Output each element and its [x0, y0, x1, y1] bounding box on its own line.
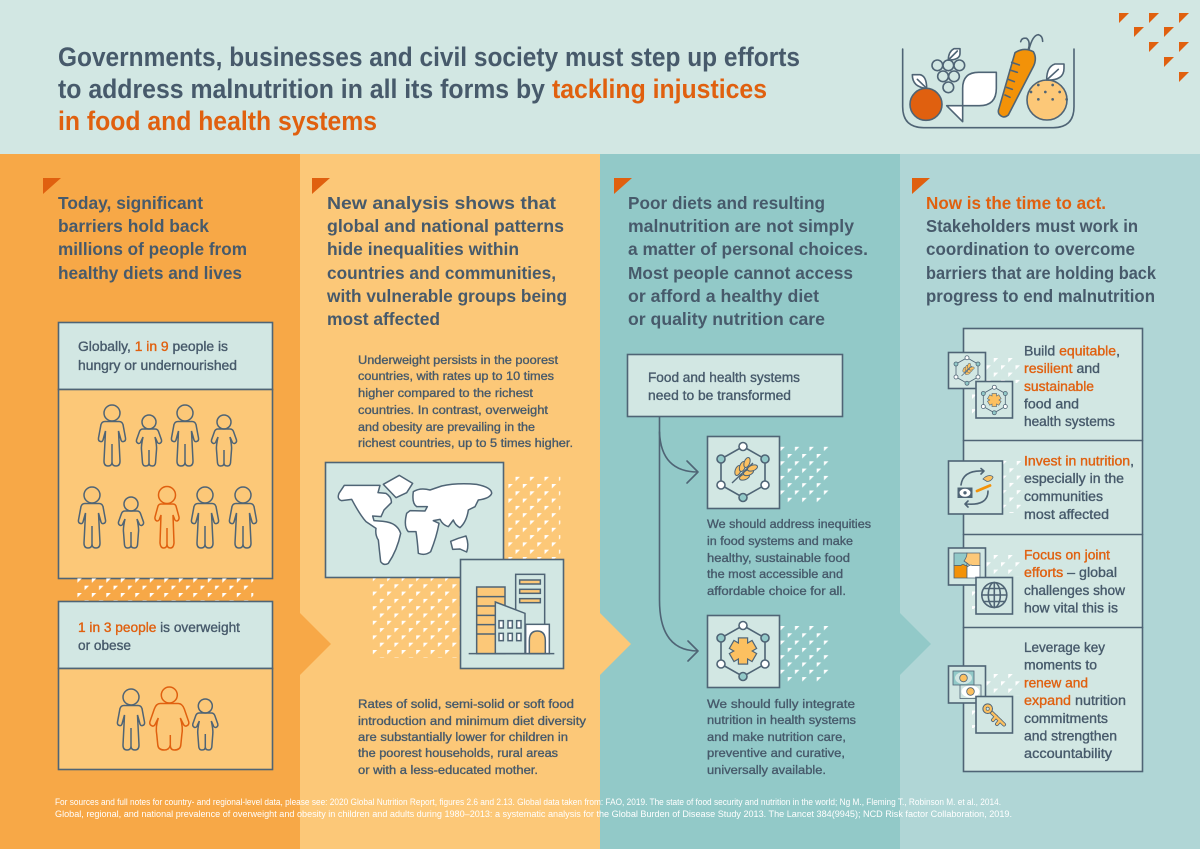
text: underweight and overweight	[358, 353, 573, 450]
callout: 1 in 9 hungry: Globally, 1 in 9 people is	[78, 339, 228, 354]
pictogram: three people, one highlighted	[58, 668, 272, 770]
callout: 1 in 9 hungry	[58, 322, 272, 390]
text: food systems: the most accessible and	[707, 567, 843, 581]
text: action 1: resilient and	[1024, 361, 1100, 376]
callout: 1 in 9 hungry: hungry or undernourished	[78, 358, 237, 373]
heading: inequalities: with vulnerable groups being	[326, 286, 567, 306]
text: action 1: health systems	[1024, 414, 1115, 429]
text: food systems: in food systems and make	[707, 534, 853, 548]
heading: time to act: barriers that are holding back	[926, 263, 1156, 283]
text: action 4: renew and	[1024, 676, 1088, 690]
text: health systems: preventive and curative,	[707, 746, 845, 760]
arrow: column 2 to column 3	[600, 613, 631, 675]
heading: poor diets	[628, 193, 868, 329]
title	[58, 42, 800, 136]
icon: puzzle and globe	[948, 548, 1012, 614]
heading: inequalities: countries and communities,	[327, 263, 556, 283]
heading: barriers: healthy diets and lives	[58, 263, 242, 283]
text: action 3: how vital this is	[1024, 600, 1118, 616]
heading: inequalities: hide inequalities within	[327, 239, 519, 259]
footnote: sources: Global, regional, and national prevalence of overweight and obesity in children and adults during 1980–2013: a systematic analysis for the Global Burden of Disease Study 2013. The Lancet 384(9945); NCD Risk factor Collaboration, 2019.	[55, 809, 1012, 820]
callout: 1 in 3 overweight	[58, 602, 272, 668]
icon: city buildings	[460, 560, 564, 668]
text: underweight and overweight: countries. In contrast, overweight	[358, 403, 549, 417]
callout: 1 in 3 overweight: or obese	[78, 638, 131, 653]
heading: time to act: coordination to overcome	[926, 239, 1135, 259]
header band	[0, 0, 1200, 154]
heading: poor diets: or quality nutrition care	[628, 309, 825, 329]
text: action 3: Focus on joint	[1024, 548, 1110, 562]
title: tackling injustices	[552, 74, 767, 104]
icon: medical asterisk in network	[708, 616, 780, 688]
arrow: branching lines	[660, 416, 698, 661]
text: action 2: communities	[1024, 489, 1103, 504]
text: underweight and overweight: richest countries, up to 5 times higher.	[358, 436, 573, 450]
heading: barriers	[58, 193, 247, 283]
pictogram: nine people, one highlighted	[58, 390, 272, 578]
heading: barriers: millions of people from	[58, 239, 247, 259]
heading: time to act	[926, 193, 1156, 306]
text: action 1: sustainable	[1024, 379, 1094, 394]
text: action 4: moments to	[1024, 658, 1097, 672]
text: action 2: especially in the	[1024, 471, 1124, 486]
heading: time to act: Stakeholders must work in	[926, 216, 1138, 236]
heading: poor diets: or afford a healthy diet	[628, 286, 819, 306]
text: action 4	[1024, 640, 1126, 761]
heading: barriers: Today, significant	[58, 193, 203, 213]
heading: poor diets: malnutrition are not simply	[628, 216, 854, 236]
heading: barriers: barriers hold back	[58, 216, 209, 236]
list panel background	[964, 328, 1142, 772]
icon: section flag	[614, 178, 632, 194]
heading: poor diets: Poor diets and resulting	[628, 193, 825, 213]
panel: poor diets	[614, 178, 871, 777]
triangle pattern: action 1	[972, 358, 1022, 416]
icon: section flag	[43, 178, 61, 194]
text: underweight and overweight: higher compared to the richest	[358, 386, 534, 400]
panel: new analysis	[312, 178, 587, 777]
panel: time to act	[912, 178, 1156, 772]
triangle pattern: action 3	[972, 555, 1022, 609]
callout: systems need to be transformed: need to be transformed	[648, 388, 791, 403]
text: action 3	[1024, 548, 1125, 616]
heading: time to act: progress to end malnutrition	[926, 286, 1155, 306]
triangle pattern: below map	[373, 577, 463, 658]
decorative corner triangles	[1119, 13, 1189, 82]
text: action 1	[1024, 344, 1120, 429]
heading: inequalities	[326, 193, 567, 329]
footnote: sources	[55, 797, 1012, 820]
callout: systems need to be transformed: Food and health systems	[648, 370, 800, 385]
footnote: sources: For sources and full notes for country- and regional-level data, please see: 2020 Global Nutrition Report, figures 2.6 and 2.13. Global data taken from: FAO, 2019. The state of food security and nutrition in the world; Ng M., Fleming T., Robinson M. et al., 2014.	[55, 797, 1001, 808]
icon: money and key	[948, 666, 1012, 733]
text: food systems: We should address inequities	[707, 517, 871, 531]
text: action 4: and strengthen	[1024, 728, 1117, 744]
text: health systems: and make nutrition care,	[707, 730, 846, 744]
text: action 1: Build equitable,	[1024, 344, 1120, 358]
text: food systems	[707, 517, 871, 598]
callout: systems need to be transformed	[628, 354, 842, 416]
text: complementary feeding: the poorest households, rural areas	[358, 746, 558, 760]
title: Governments, businesses and civil society must step up efforts	[58, 42, 800, 72]
title: in food and health systems	[58, 106, 377, 136]
text: complementary feeding: Rates of solid, semi-solid or soft food	[358, 697, 574, 711]
icon: section flag	[912, 178, 930, 194]
text: action 3: challenges show	[1024, 583, 1125, 598]
panel: today's barriers	[43, 178, 272, 770]
text: action 2: most affected	[1024, 507, 1109, 522]
text: action 4: accountability	[1024, 746, 1112, 761]
icon: money cycle into food	[948, 461, 1002, 514]
triangle pattern: right of map	[508, 477, 560, 561]
heading: poor diets: a matter of personal choices.	[628, 239, 868, 259]
text: action 4: expand nutrition	[1024, 693, 1126, 708]
text: complementary feeding: are substantially lower for children in	[358, 730, 568, 744]
triangle pattern strip	[77, 578, 253, 601]
text: complementary feeding: or with a less-educated mother.	[358, 763, 538, 777]
text: health systems: We should fully integrate	[707, 697, 855, 711]
icon: bowl of fruit and vegetables	[903, 35, 1074, 128]
arrow: column 1 to column 2	[300, 613, 331, 675]
text: action 2: Invest in nutrition ,	[1024, 454, 1134, 468]
text: food systems: healthy, sustainable food	[707, 551, 850, 565]
triangle pattern: health systems	[773, 626, 829, 682]
text: food systems: affordable choice for all.	[707, 584, 846, 598]
text: health systems: nutrition in health systems	[707, 713, 856, 727]
triangle pattern: food systems	[773, 447, 829, 503]
text: complementary feeding: introduction and minimum diet diversity	[358, 714, 587, 728]
arrow: column 3 to column 4	[900, 613, 931, 675]
title: to address malnutrition in all its forms by	[58, 74, 545, 104]
callout: 1 in 3 overweight: 1 in 3 people is overweight	[78, 620, 240, 635]
text: underweight and overweight: and obesity are prevailing in the	[358, 420, 535, 434]
text: health systems	[707, 697, 856, 777]
heading: poor diets: Most people cannot access	[628, 263, 853, 283]
text: action 3: efforts – global	[1024, 565, 1117, 580]
text: action 2	[1024, 454, 1134, 522]
text: underweight and overweight: countries, with rates up to 10 times	[358, 369, 554, 383]
triangle pattern: action 4	[972, 674, 1022, 728]
text: underweight and overweight: Underweight persists in the poorest	[358, 353, 559, 367]
icon: world map	[326, 462, 504, 578]
heading: inequalities: most affected	[327, 309, 440, 329]
icon: wheat in network	[708, 436, 780, 508]
heading: inequalities: New analysis shows that	[327, 193, 556, 213]
text: action 4: commitments	[1024, 711, 1108, 726]
text: action 4: Leverage key	[1024, 640, 1105, 655]
text: health systems: universally available.	[707, 763, 826, 777]
heading: inequalities: global and national patterns	[327, 216, 564, 236]
text: complementary feeding	[358, 697, 587, 777]
text: action 1: food and	[1024, 396, 1079, 412]
triangle pattern: action 2	[1003, 461, 1021, 513]
icon: section flag	[312, 178, 330, 194]
heading: time to act: Now is the time to act.	[926, 193, 1106, 213]
icon: food and health networks	[948, 352, 1012, 418]
